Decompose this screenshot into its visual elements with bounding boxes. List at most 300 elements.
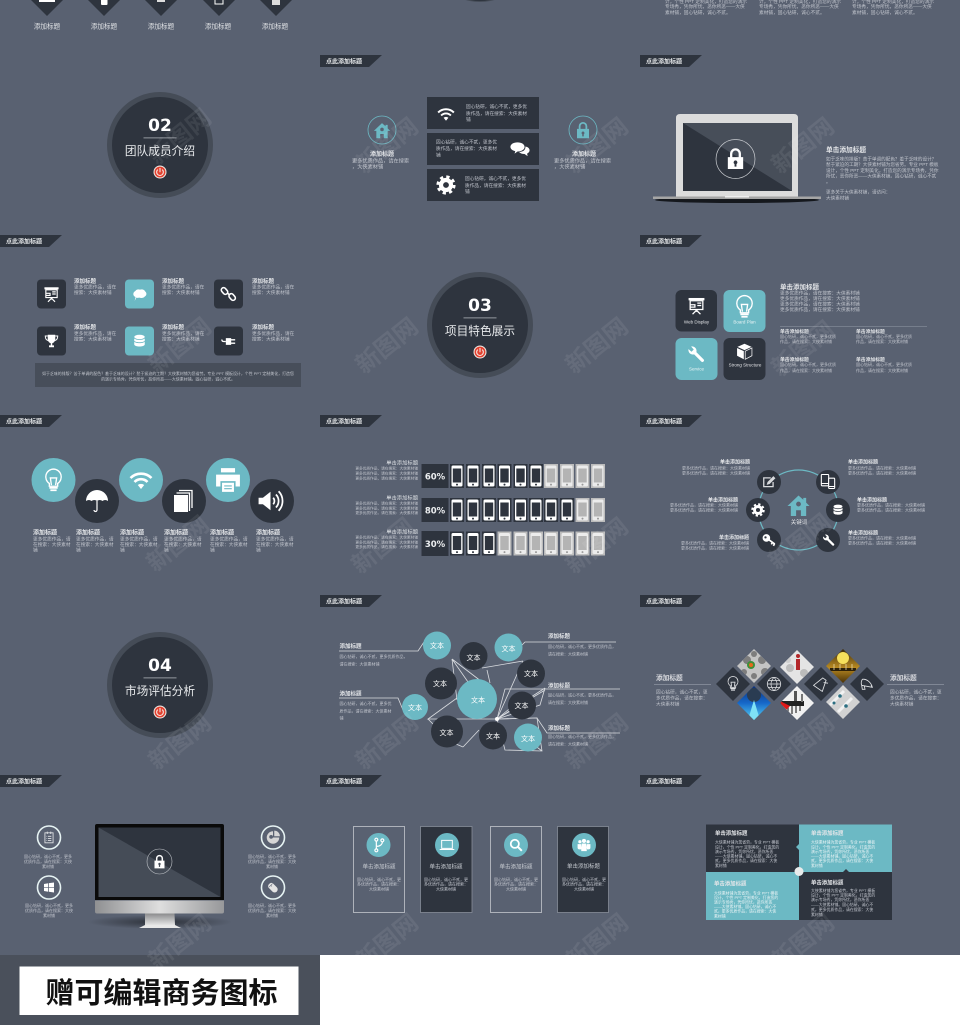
row captions: 更多优质作品，请在搜索：大侠素材铺 — [355, 466, 418, 470]
diamond labels: 添加标题 — [262, 22, 289, 30]
text: clipboard: 优质作品，请在搜索：大侠 — [24, 858, 72, 864]
watermarks: 新图网 — [351, 909, 424, 975]
feature: cloud bubble: 搜索：大侠素材铺 — [162, 289, 200, 296]
slide header: row 5 right: 点此添加标题 — [646, 777, 682, 785]
network captions: 添加标题 — [340, 690, 362, 698]
slide header: row 2 left: 点此添加标题 — [6, 237, 42, 245]
captions: 更多优质作品，请 — [120, 536, 158, 542]
info row wifi: 固心钻研，诚心不贰，更多优 — [466, 103, 527, 110]
text block: laptop description: 大侠素材铺 — [826, 194, 849, 202]
captions: 添加标题 — [210, 528, 234, 536]
watermarks: 新图网 — [347, 513, 420, 579]
quadrant bottom right — [799, 869, 892, 920]
quadrant bottom right: 演示专场秀，凭你所忧，恶你所恶 — [811, 897, 869, 902]
section circle 02: 团队成员介绍 — [125, 144, 195, 158]
quadrant top left: 单击添加标题 — [715, 829, 748, 837]
slide header: row 1 middle — [320, 55, 382, 67]
card 2 dark: 大侠素材铺 — [436, 886, 456, 892]
bubble dark: 文本 — [440, 728, 454, 737]
icon diamond: globe — [757, 667, 791, 701]
watermarks: 新图网 — [144, 909, 217, 975]
network captions: 固心钻研，诚心不贰，更多优质作品， — [548, 643, 616, 649]
panel: four rounded tiles — [676, 290, 766, 380]
bubble teal — [402, 694, 428, 720]
section circle 01 cropped — [427, 0, 533, 2]
watermarks: 新图网 — [767, 709, 840, 775]
ring captions: 更多优质作品，请在搜索：大侠素材铺 — [848, 534, 916, 540]
info row gear: 质作品，请在搜索：大侠素材 — [465, 182, 526, 189]
quadrant bottom right: 设计，个性 PPT 定制美化，打造您的 — [811, 892, 875, 898]
quadrant top right: 单击添加标题 — [811, 829, 844, 837]
captions: 更多优质作品，请 — [33, 536, 71, 542]
ring captions: 更多优质作品，请在搜索：大侠素材铺 — [681, 540, 749, 546]
bubble dark — [460, 642, 488, 670]
quadrant bottom left: 贰，更多优质作品，请在搜索：大侠 — [714, 908, 776, 914]
row captions: 更多优质作品，请在搜索：大侠素材铺 — [355, 534, 418, 540]
card 3 outline: 固心钻研，诚心不贰，更 — [494, 876, 538, 882]
section circle 04: 市场评估分析 — [125, 684, 195, 698]
section circle 03: 03 — [468, 296, 492, 316]
text block: cropped top right columns: 素材铺，固心钻研，诚心不贰。 — [852, 9, 918, 16]
row captions: 更多优质作品，请在搜索：大侠素材铺 — [355, 470, 418, 476]
bubble dark — [479, 722, 507, 750]
slide header: row 3 middle: 点此添加标题 — [326, 417, 362, 425]
captions: 在搜索：大侠素材 — [164, 541, 202, 548]
captions: 添加标题 — [164, 528, 188, 536]
text block: tile description — [780, 282, 927, 373]
slide header: row 3 right: 点此添加标题 — [646, 417, 682, 425]
row captions: 更多优质作品，请在搜索：大侠素材铺 — [355, 500, 418, 506]
text block: tile description: 固心钻研，诚心不贰，更多优质 — [856, 361, 912, 367]
bubble dark — [508, 692, 536, 720]
text: pie: 优质作品，请在搜索：大侠 — [248, 858, 296, 864]
ring captions: 更多优质作品，请在搜索：大侠素材铺 — [857, 506, 925, 512]
bubble teal: 文本 — [521, 734, 535, 743]
text block: tile description: 固心钻研，诚心不贰，更多优质 — [856, 333, 912, 339]
captions: 在搜索：大侠素材 — [256, 541, 294, 548]
ring captions: 单击添加标题 — [720, 458, 750, 466]
row 30%: 30% — [425, 540, 446, 550]
feature: trophy: 搜索：大侠素材铺 — [74, 336, 112, 342]
center keyword: 关键词 — [791, 518, 808, 526]
watermarks: 新图网 — [767, 316, 840, 382]
card 4 dark — [558, 826, 608, 912]
quadrant top right: 大侠素材铺为您省劳，专业 PPT 模板 — [811, 840, 875, 844]
captions: 添加标题 — [33, 528, 57, 536]
row captions: 更多优质作品，请在搜索：大侠素材铺 — [355, 544, 418, 549]
watermarks: 新图网 — [351, 113, 424, 179]
watermarks: 新图网 — [767, 113, 840, 179]
circle icon printer — [206, 458, 250, 502]
slide header: row 5 middle — [320, 775, 382, 787]
panel: monitor with four round icons — [24, 824, 296, 929]
watermarks: 新图网 — [767, 909, 840, 975]
text block: laptop description: 设计，个性 PPT 定制美化，打造您的演示专场秀，凭你 — [826, 167, 939, 174]
feature: trophy: 更多优质作品，请在 — [74, 330, 117, 337]
network captions: 质作品，请在搜索：大侠素材 — [340, 708, 392, 714]
captions: 在搜索：大侠素材 — [33, 541, 71, 548]
card 4 dark: 多优质作品，请在搜索： — [562, 880, 606, 886]
bubble dark: 文本 — [466, 653, 480, 662]
caption bar: 的演示专场秀，凭你所忧，恶你所恶——大侠素材铺。固心钻研，诚心不贰。 — [101, 376, 235, 382]
card 3 outline — [490, 826, 542, 912]
text: mouse — [248, 902, 296, 918]
icon diamond: megaphone — [850, 667, 884, 701]
slide header: row 4 middle — [320, 595, 382, 607]
text: mouse: 素材铺 — [266, 912, 278, 918]
diamond labels: 添加标题 — [148, 22, 175, 30]
left caption: 固心钻研，诚心不贰，更 — [656, 688, 708, 696]
row captions: 更多优质作品，请在搜索：大侠素材铺 — [355, 476, 418, 480]
captions: 更多优质作品，请 — [76, 536, 114, 542]
card 4 dark: 固心钻研，诚心不贰，更 — [562, 876, 606, 882]
text block: cropped top right columns: 素材铺，固心钻研，诚心不贰。 — [665, 9, 731, 16]
text: mouse: 优质作品，请在搜索：大侠 — [248, 907, 296, 913]
feature: cloud bubble: 更多优质作品，请在 — [162, 284, 205, 290]
icon: pie — [262, 826, 284, 849]
text block: laptop description — [826, 145, 939, 202]
feature: chain — [214, 277, 295, 308]
feature: plug — [214, 323, 295, 356]
left circle icon — [368, 116, 396, 144]
feature: board — [37, 277, 117, 308]
captions: 铺 — [120, 546, 125, 554]
slide header: row 4 middle: 点此添加标题 — [326, 597, 362, 605]
watermarks: 新图网 — [561, 909, 634, 975]
text block: cropped top right columns: 专场秀，凭你所忧，恶你所恶——大侠 — [852, 3, 932, 10]
network captions: 请在搜索：大侠素材铺 — [548, 650, 588, 656]
quadrant top right — [796, 824, 892, 872]
icon diamond 1 — [30, 0, 64, 16]
photo diamond: golden bulb — [826, 649, 860, 683]
text block: laptop description: 。 — [826, 179, 831, 184]
text block: laptop description: 愁于紧迫的工期？大侠素材铺为您省劳。专业 PPT 模板 — [826, 161, 939, 168]
bubble teal — [494, 634, 522, 662]
network captions: 固心钻研，诚心不贰，更多优质作品， — [548, 733, 616, 739]
row captions: 更多优质作品，请在搜索：大侠素材铺 — [355, 540, 418, 544]
right caption: ，大侠素材铺 — [554, 162, 585, 170]
section circle 04 — [107, 632, 213, 738]
captions: 铺 — [33, 546, 38, 554]
right caption: 多优质作品，请在搜索： — [890, 694, 942, 702]
watermarks: 新图网 — [561, 113, 634, 179]
panel: bubble network — [339, 632, 620, 752]
bubble dark — [431, 716, 463, 748]
network captions: 固心钻研，诚心不贰，更多优 — [340, 700, 392, 706]
photo diamond: maze — [826, 685, 860, 719]
center dot — [794, 867, 804, 876]
banner: bottom gift title: 赠可编辑商务图标 — [45, 977, 278, 1010]
card 2 dark: 单击添加标题 — [429, 862, 463, 870]
tile: service: Service — [689, 366, 704, 372]
quadrant top right: ——大侠素材铺。固心钻研，诚心不 — [811, 854, 873, 858]
info row chat: 铺 — [436, 152, 441, 158]
right caption: 添加标题 — [890, 673, 917, 682]
row 60% — [422, 464, 605, 488]
info row wifi — [427, 97, 539, 129]
watermarks: 新图网 — [764, 509, 837, 575]
captions: 铺 — [210, 546, 215, 554]
quadrant bottom left: 设计，个性 PPT 定制美化，打造您的 — [714, 895, 778, 900]
card 4 dark: 大侠素材铺 — [574, 886, 594, 892]
card 1 outline: 单击添加标题 — [362, 862, 396, 870]
quadrant bottom left: 演示专场秀，凭你所忧，恶你所恶 — [714, 900, 772, 904]
section circle 03 — [427, 272, 533, 378]
circle icon wifi — [119, 458, 163, 502]
watermarks: 新图网 — [142, 511, 215, 577]
quadrant top left: 设计，个性 PPT 定制美化，打造您的 — [715, 844, 779, 850]
info row gear: 固心钻研，诚心不贰，更多优 — [465, 175, 526, 182]
feature: board: 搜索：大侠素材铺 — [74, 289, 112, 296]
photo diamond: gears — [737, 649, 771, 683]
feature: chain: 更多优质作品，请在 — [252, 284, 295, 290]
quadrant bottom left: 单击添加标题 — [714, 880, 747, 888]
right caption — [554, 150, 611, 170]
panel: three dark info rows with side circles — [352, 97, 611, 201]
feature: cloud bubble: 添加标题 — [162, 277, 185, 285]
ring captions: 更多优质作品，请在搜索：大侠素材铺 — [670, 502, 738, 508]
node edit — [757, 470, 781, 494]
info row wifi: 质作品，请在搜索：大侠素材 — [466, 110, 527, 117]
circle icon pages — [162, 479, 206, 523]
network captions: 请在搜索：大侠素材铺 — [548, 740, 588, 746]
quadrant top left — [706, 824, 799, 875]
quadrant top left: 演示专场秀，凭你所忧，恶你所恶 — [715, 849, 773, 854]
bubble teal: 文本 — [430, 641, 444, 650]
text block: tile description: 单击添加标题 — [780, 282, 820, 291]
feature: trophy — [37, 323, 117, 356]
watermarks: 新图网 — [144, 313, 217, 379]
captions: 在搜索：大侠素材 — [120, 541, 158, 548]
photo diamond: red figure — [780, 650, 814, 684]
circle icon umbrella — [75, 479, 119, 523]
slide header: row 3 middle — [320, 415, 382, 427]
ring captions: 单击添加标题 — [848, 530, 878, 536]
photo diamond: earth — [737, 686, 771, 720]
circle icon bulb — [32, 458, 76, 502]
text block: tile description: 固心钻研，诚心不贰，更多优质 — [780, 333, 836, 339]
bubble teal: 文本 — [502, 644, 516, 653]
icon diamond: flask — [804, 667, 838, 701]
info row chat: 固心钻研，诚心不贰，更多优 — [436, 138, 497, 146]
watermarks: 新图网 — [561, 709, 634, 775]
text block: tile description: 更多优质作品，请在搜索：大侠素材铺 — [780, 300, 860, 308]
quadrant bottom right: 单击添加标题 — [811, 878, 844, 886]
network captions: 请在搜索：大侠素材铺 — [340, 660, 380, 666]
quadrant top right: 演示专场秀，凭你所忧，恶你所恶 — [811, 849, 869, 854]
right caption — [887, 673, 944, 708]
tile: board plan: Board Plan — [733, 320, 756, 324]
captions: 更多优质作品，请 — [256, 536, 294, 542]
ring captions: 更多优质作品，请在搜索：大侠素材铺 — [857, 502, 925, 508]
card 3 outline: 多优质作品，请在搜索： — [494, 880, 538, 886]
ring captions: 更多优质作品，请在搜索：大侠素材铺 — [670, 506, 738, 512]
left caption: 添加标题 — [370, 150, 394, 158]
text: clipboard: 固心钻研，诚心不贰，更多 — [24, 853, 72, 859]
ring captions: 单击添加标题 — [719, 534, 749, 541]
text block: tile description: 作品，请在搜索：大侠素材铺 — [780, 338, 832, 344]
info row wifi: 铺 — [466, 116, 471, 123]
card 1 outline: 固心钻研，诚心不贰，更 — [357, 876, 401, 882]
ring captions: 单击添加标题 — [848, 458, 878, 466]
text block: tile description: 更多优质作品，请在搜索：大侠素材铺 — [780, 290, 860, 296]
panel: four quadrant puzzle — [706, 824, 892, 920]
text block: tile description: 单击添加标题 — [856, 356, 885, 363]
icon: windows — [38, 876, 60, 899]
ring captions: 单击添加标题 — [857, 496, 887, 504]
bubble dark — [517, 660, 545, 688]
bubble teal — [514, 724, 542, 752]
bubble teal — [423, 632, 451, 660]
icon: clipboard — [38, 826, 60, 849]
network captions — [340, 632, 616, 746]
info row chat: 质作品，请在搜索：大侠素材 — [436, 145, 497, 152]
text block: laptop description: 所忧，恶你所恶——大侠素材铺。固心钻研，诚心不贰 — [826, 172, 937, 180]
bubble dark: 文本 — [486, 732, 500, 740]
quadrant top left: 贰，更多优质作品，请在搜索：大侠 — [715, 858, 777, 863]
network captions: 添加标题 — [548, 682, 571, 690]
bubble dark: 文本 — [524, 669, 538, 678]
right caption: 添加标题 — [572, 150, 596, 158]
bubble teal center: 文本 — [471, 696, 485, 704]
left caption: 大侠素材铺 — [656, 700, 680, 708]
ring captions: 更多优质作品，请在搜索：大侠素材铺 — [848, 470, 916, 476]
panel: four vertical cards — [354, 826, 608, 912]
watermarks — [142, 104, 840, 975]
slide header: row 3 left — [0, 415, 62, 427]
text block: laptop description: 更多关于大侠素材铺，请访问： — [826, 188, 890, 196]
photo diamond: figures on blocks — [780, 686, 814, 720]
banner: bottom gift title — [0, 955, 320, 1025]
left caption: 多优质作品，请在搜索： — [656, 694, 708, 702]
feature: board: 更多优质作品，请在 — [74, 284, 117, 290]
feature: database: 搜索：大侠素材铺 — [162, 336, 200, 342]
ring captions: 更多优质作品，请在搜索：大侠素材铺 — [848, 464, 916, 470]
slide header: row 3 left: 点此添加标题 — [6, 417, 42, 425]
row captions: 单击添加标题 — [386, 528, 419, 536]
slide header: row 3 right — [640, 415, 702, 427]
text block: cropped top right columns — [665, 0, 934, 16]
card 2 dark: 多优质作品，请在搜索： — [424, 880, 468, 886]
right circle icon — [569, 116, 597, 144]
feature: chain: 添加标题 — [252, 277, 275, 285]
captions: 铺 — [164, 546, 169, 554]
card 4 dark: 单击添加标题 — [567, 862, 600, 870]
row captions: 更多优质作品，请在搜索：大侠素材铺 — [355, 506, 418, 510]
node wrench — [816, 528, 840, 552]
ring captions: 更多优质作品，请在搜索：大侠素材铺 — [682, 470, 750, 476]
captions — [33, 528, 294, 554]
text block: tile description: 作品，请在搜索：大侠素材铺 — [856, 367, 908, 373]
center keyword — [787, 495, 810, 526]
text block: tile description: 固心钻研，诚心不贰，更多优质 — [780, 361, 836, 367]
tile: strong structure: Strong Structure — [729, 362, 762, 368]
text: clipboard — [24, 853, 72, 869]
icon diamond: bulb — [716, 667, 750, 701]
watermarks: 新图网 — [561, 313, 634, 379]
right caption: 固心钻研，诚心不贰，更 — [890, 688, 942, 696]
laptop mockup — [653, 114, 821, 203]
row 60%: 60% — [425, 472, 446, 482]
card 1 outline: 多优质作品，请在搜索： — [357, 880, 401, 886]
left caption — [654, 673, 711, 708]
quadrant top left: ——大侠素材铺。固心钻研，诚心不 — [715, 854, 777, 858]
section circle 02: 02 — [148, 116, 172, 136]
text block: tile description: 更多优质作品，请在搜索：大侠素材铺 — [780, 306, 860, 313]
watermarks: 新图网 — [144, 709, 217, 775]
text block: tile description: 作品，请在搜索：大侠素材铺 — [856, 338, 908, 344]
left caption: 添加标题 — [656, 673, 683, 682]
slide header: row 5 left — [0, 775, 62, 787]
right caption: 大侠素材铺 — [890, 700, 914, 708]
panel: cropped icon diamonds row — [30, 0, 293, 30]
info row chat — [427, 133, 539, 165]
circle icon speaker — [250, 479, 294, 523]
icon: mouse — [262, 876, 284, 899]
ring captions — [670, 458, 925, 550]
network captions: 固心钻研，诚心不贰，更多优质作品， — [548, 692, 616, 698]
quadrant bottom left: 大侠素材铺为您省劳，专业 PPT 模板 — [714, 890, 778, 896]
quadrant bottom left: 素材铺 — [714, 914, 726, 918]
slide header: row 5 right — [640, 775, 702, 787]
row 80%: 80% — [425, 506, 446, 516]
info row gear: 铺 — [465, 188, 470, 195]
captions: 更多优质作品，请 — [210, 536, 248, 542]
captions: 铺 — [76, 546, 81, 554]
feature: database: 添加标题 — [162, 323, 185, 331]
text block: tile description: 单击添加标题 — [856, 328, 885, 335]
feature: plug: 添加标题 — [252, 323, 275, 331]
tile: web display: Web Display — [684, 320, 710, 324]
text block: cropped top right columns: 专场秀，凭你所忧，恶你所恶——大侠 — [665, 3, 745, 10]
bubble teal center — [457, 679, 497, 719]
captions: 添加标题 — [76, 528, 100, 536]
slide header: row 1 right: 点此添加标题 — [646, 57, 682, 65]
quadrant top right: 贰，更多优质作品，请在搜索：大侠 — [811, 858, 873, 863]
ring captions: 单击添加标题 — [708, 496, 738, 504]
captions: 添加标题 — [256, 528, 280, 536]
quadrant bottom left: ——大侠素材铺。固心钻研，诚心不 — [714, 904, 776, 909]
row captions — [355, 458, 419, 549]
row captions: 单击添加标题 — [386, 494, 419, 502]
row captions: 更多优质作品，请在搜索：大侠素材铺 — [355, 510, 418, 515]
text block: tile description: 更多优质作品，请在搜索：大侠素材铺 — [780, 295, 860, 302]
panel: ring diagram — [670, 458, 925, 552]
panel: six icon feature grid — [35, 277, 301, 387]
ring captions: 更多优质作品，请在搜索：大侠素材铺 — [682, 464, 750, 470]
card 3 outline: 单击添加标题 — [499, 862, 533, 870]
bubble teal: 文本 — [408, 703, 422, 712]
quadrant bottom right: 素材铺 — [811, 912, 823, 917]
quadrant top left: 大侠素材铺为您省劳，专业 PPT 模板 — [715, 840, 779, 844]
feature: database — [125, 323, 205, 356]
section circle 03: 项目特色展示 — [445, 324, 515, 338]
network captions: 铺 — [340, 714, 344, 720]
quadrant top left: 素材铺 — [715, 863, 727, 868]
panel: phone pictogram chart — [355, 458, 605, 556]
caption bar: 如于乏味的排版？苦于单调的配色？羞于乏味的设计？愁于紧迫的工期？大侠素材铺为您省劳。专业 PPT 模板设计，个性 PPT 定制美化，打造您 — [42, 371, 294, 376]
feature: chain: 搜索：大侠素材铺 — [252, 289, 290, 296]
network captions: 添加标题 — [548, 724, 571, 732]
captions: 在搜索：大侠素材 — [76, 541, 114, 548]
text block: tile description: 单击添加标题 — [780, 328, 809, 335]
quadrant bottom right: ——大侠素材铺。固心钻研，诚心不 — [811, 902, 873, 907]
section circle 02 — [107, 92, 213, 198]
icon diamond 5 — [259, 0, 293, 16]
captions: 更多优质作品，请 — [164, 536, 202, 542]
text: mouse: 固心钻研，诚心不贰，更多 — [248, 902, 296, 908]
network lines — [339, 642, 620, 751]
